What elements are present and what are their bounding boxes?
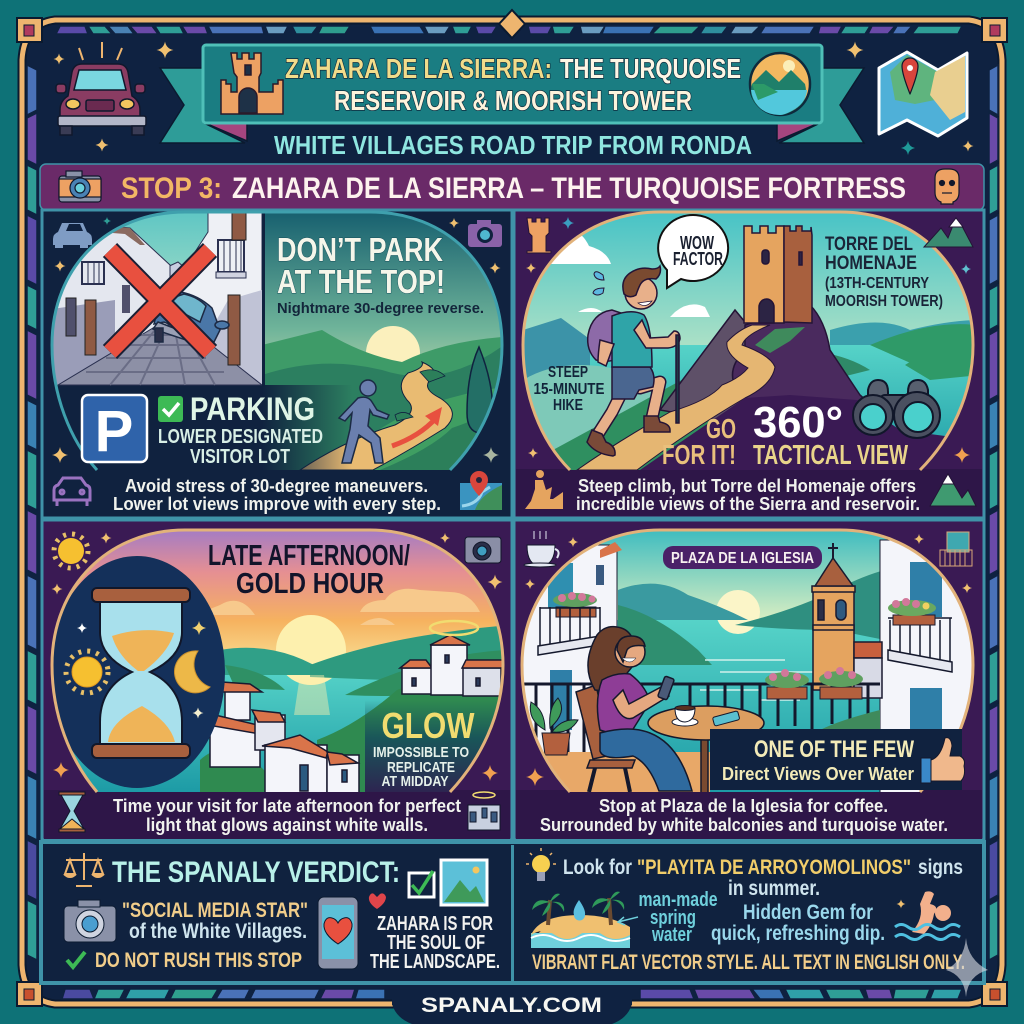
- right scene: [265, 214, 500, 354]
- spring water label: water: [651, 924, 692, 946]
- panel sparkles: [52, 532, 502, 781]
- icon: woman with phone: [588, 627, 692, 791]
- icon: walker: [339, 380, 389, 463]
- hidden gem text: quick, refreshing dip.: [711, 922, 885, 945]
- playita text: in summer.: [728, 877, 820, 900]
- panel: hike: [514, 210, 984, 518]
- callout: wow factor: [658, 215, 728, 288]
- go for it: [662, 413, 736, 470]
- soul of landscape: ZAHARA IS FOR: [377, 913, 493, 935]
- caption: incredible views of the Sierra and reservoir.: [576, 494, 920, 514]
- playita text: [563, 856, 963, 900]
- title: [285, 53, 741, 116]
- panel: verdict: [41, 842, 988, 997]
- caption: [113, 476, 441, 514]
- icon: car: [56, 42, 146, 135]
- caption: Surrounded by white balconies and turquoise water.: [540, 815, 948, 835]
- heading: gold hour: [208, 540, 410, 600]
- panel sparkles: [52, 217, 500, 463]
- icon: mountains caption: [930, 474, 976, 506]
- icon: halo: [430, 621, 478, 635]
- caption: [113, 796, 461, 835]
- flower boxes: [767, 687, 862, 699]
- icon: light bulb: [526, 848, 556, 881]
- icon: lake emblem: [750, 53, 810, 115]
- title: ZAHARA DE LA SIERRA:: [285, 53, 552, 84]
- panel: parking: [42, 210, 512, 518]
- night circle: [49, 556, 225, 788]
- playita text: Look for: [563, 856, 632, 879]
- icon: phone heart: [318, 897, 358, 969]
- view: 360 degrees: TACTICAL VIEW: [753, 439, 908, 470]
- icon: swimmer: [895, 891, 960, 940]
- heading: gold hour: LATE AFTERNOON/: [208, 540, 410, 572]
- spring water label: [618, 889, 718, 946]
- soul of landscape: [370, 913, 500, 973]
- caption: [540, 796, 948, 835]
- icon: island: [531, 892, 630, 948]
- panel sparkles: [526, 217, 971, 463]
- icon: check and picture: [409, 860, 487, 905]
- do not rush: DO NOT RUSH THIS STOP: [95, 949, 302, 972]
- illustration: parking scene: [45, 212, 510, 475]
- tower label: HOMENAJE: [825, 253, 917, 274]
- label: glow: AT MIDDAY: [382, 773, 448, 790]
- table: [648, 706, 764, 793]
- icon: sun: [66, 651, 108, 693]
- icon: tower small: [527, 218, 551, 253]
- icon: parking sign: P: [95, 399, 133, 464]
- panel sparkles: [525, 534, 972, 786]
- heading: don't park: AT THE TOP!: [277, 263, 445, 300]
- icon: hourglass: [92, 588, 190, 758]
- stop heading bar: STOP 3:: [121, 172, 222, 205]
- parking label: [158, 391, 323, 468]
- church tower: [812, 543, 882, 698]
- caption: Steep climb, but Torre del Homenaje offers: [578, 476, 916, 496]
- icon: sun corner: [54, 534, 88, 568]
- icon: moon: [174, 651, 210, 693]
- plant: [530, 698, 578, 755]
- heading: don't park: DON’T PARK: [277, 231, 443, 268]
- label: glow: [373, 705, 475, 790]
- subtitle: WHITE VILLAGES ROAD TRIP FROM RONDA: [274, 130, 752, 160]
- icon: hourglass small: [59, 792, 85, 832]
- icon: camera small: [468, 220, 502, 247]
- watermark star: [946, 938, 988, 997]
- icon: parking sign: [82, 395, 147, 464]
- parking label: VISITOR LOT: [190, 446, 290, 468]
- left alley scene: [124, 214, 208, 265]
- icon: car outline: [54, 478, 90, 506]
- heading: don't park: [277, 231, 445, 300]
- bushes left: [200, 753, 264, 792]
- note: Nightmare 30-degree reverse.: [277, 300, 484, 317]
- illustration: tower hill: [520, 212, 980, 475]
- caption: Stop at Plaza de la Iglesia for coffee.: [599, 796, 888, 816]
- chair: [576, 685, 635, 792]
- go for it: FOR IT!: [662, 439, 736, 470]
- tower label: MOORISH TOWER): [825, 293, 943, 310]
- icon: map pin: [460, 471, 502, 510]
- caption: [576, 476, 920, 514]
- icon: camera: [59, 171, 101, 202]
- heading: gold hour: GOLD HOUR: [236, 568, 384, 600]
- icon: camera: [465, 537, 501, 563]
- white village right: [400, 635, 503, 696]
- left building: [524, 544, 618, 752]
- parking label: LOWER DESIGNATED: [158, 426, 323, 448]
- title: RESERVOIR & MOORISH TOWER: [334, 85, 692, 116]
- icon: phone on table: [712, 711, 740, 726]
- hike label: STEEP: [548, 364, 588, 381]
- callout: direct views: Direct Views Over Water: [722, 764, 914, 784]
- red cross: [110, 250, 210, 352]
- icon: hiker small: [525, 470, 563, 509]
- soul of landscape: THE SOUL OF: [387, 932, 485, 954]
- playita text: "PLAYITA DE ARROYOMOLINOS": [637, 856, 911, 879]
- icon: red arrow: [392, 407, 442, 446]
- label: plaza: PLAZA DE LA IGLESIA: [671, 550, 814, 567]
- soul of landscape: THE LANDSCAPE.: [370, 951, 500, 973]
- go for it: GO: [706, 413, 736, 444]
- header sparkles: [54, 42, 974, 155]
- terrace railing: [522, 684, 880, 756]
- social media star: [122, 899, 308, 943]
- tower label: TORRE DEL: [825, 234, 913, 255]
- hike label: HIKE: [553, 397, 583, 414]
- social media star: of the White Villages.: [129, 920, 307, 943]
- icon: camera: [64, 900, 116, 942]
- caption: Avoid stress of 30-degree maneuvers.: [125, 476, 428, 496]
- heading: verdict: THE SPANALY VERDICT:: [112, 856, 400, 889]
- spring water label: man-made: [638, 889, 718, 911]
- hike label: [534, 364, 605, 414]
- callout: direct views: [710, 729, 962, 790]
- spring water label: spring: [650, 907, 696, 929]
- parking label: PARKING: [190, 391, 315, 427]
- view: 360 degrees: [753, 398, 908, 470]
- label: plaza: [663, 546, 822, 569]
- icon: mask: [935, 169, 959, 204]
- caption: light that glows against white walls.: [146, 815, 428, 835]
- footer tab: SPANALY.COM: [421, 994, 602, 1017]
- header banner: [160, 45, 864, 160]
- callout: wow factor: WOW: [680, 233, 714, 253]
- icon: scales: [64, 853, 104, 886]
- label: glow: IMPOSSIBLE TO: [373, 744, 469, 761]
- hidden gem text: [711, 901, 885, 945]
- icon: balcony: [940, 532, 972, 566]
- tower label: (13TH-CENTURY: [825, 275, 929, 292]
- icon: mountains: [924, 218, 973, 247]
- footer tab: [392, 985, 632, 1024]
- hike label: 15-MINUTE: [534, 381, 605, 398]
- caption: Time your visit for late afternoon for perfect: [113, 796, 461, 816]
- view: 360 degrees: 360°: [753, 398, 843, 447]
- caption: Lower lot views improve with every step.: [113, 494, 441, 514]
- icon: binoculars: [853, 380, 940, 438]
- panel: gold hour: [42, 520, 512, 840]
- icon: village small: [468, 792, 500, 830]
- hidden gem text: Hidden Gem for: [743, 901, 873, 924]
- callout: direct views: ONE OF THE FEW: [754, 736, 914, 763]
- icon: coffee steam: [524, 531, 559, 567]
- label: glow: REPLICATE: [387, 759, 455, 776]
- ribbon tails: [160, 68, 864, 143]
- right building: [880, 540, 976, 795]
- illustration: plaza terrace: [520, 530, 976, 795]
- title: THE TURQUOISE: [560, 53, 741, 84]
- playita text: signs: [918, 856, 963, 879]
- icon: thumbs up: [921, 738, 965, 783]
- social media star: "SOCIAL MEDIA STAR": [122, 899, 308, 922]
- stop heading bar: ZAHARA DE LA SIERRA – THE TURQUOISE FORTRESS: [232, 172, 906, 205]
- callout: wow factor: FACTOR: [673, 249, 723, 269]
- backpack: [588, 310, 630, 361]
- legs: [598, 382, 660, 434]
- white village left: [208, 682, 359, 797]
- stop heading bar: [40, 164, 984, 210]
- icon: hiker: [587, 266, 680, 456]
- illustration: golden sunset: [49, 530, 510, 797]
- car tilted: [153, 292, 229, 347]
- label: glow: GLOW: [382, 705, 475, 746]
- panel: plaza: [514, 520, 984, 840]
- tower label: [825, 234, 943, 310]
- icon: castle: [221, 53, 283, 114]
- icon: heart: [369, 893, 386, 909]
- icon: car small: [53, 223, 92, 248]
- icon: moorish tower: [744, 226, 812, 323]
- icon: map: [879, 52, 967, 136]
- icon: coffee cup: [672, 706, 698, 726]
